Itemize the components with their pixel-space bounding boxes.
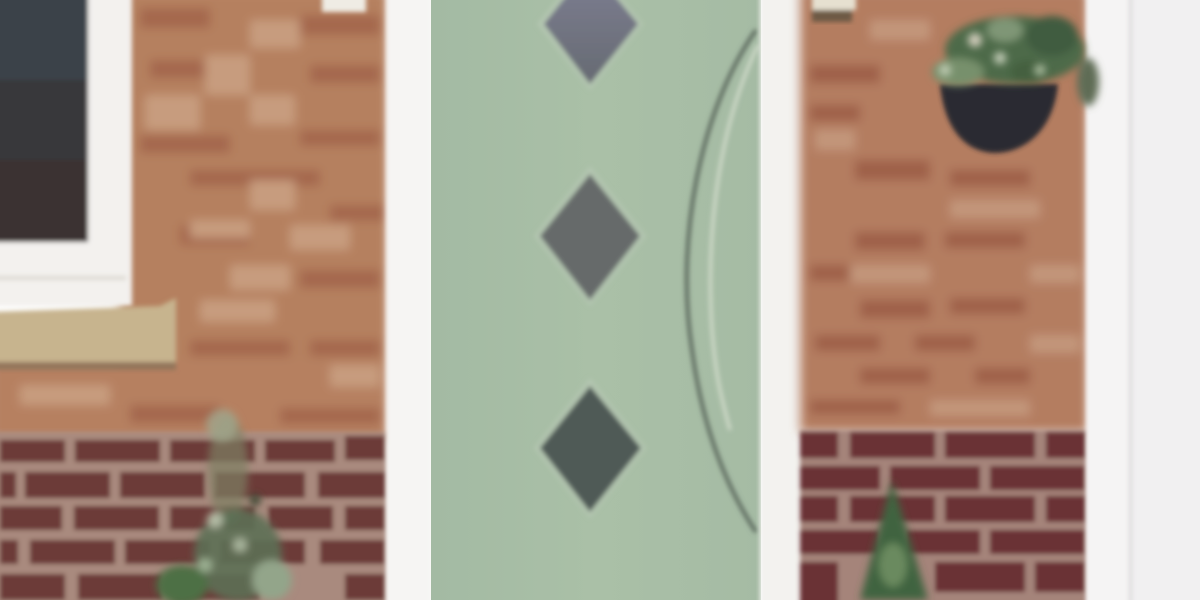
- right blue brick plinth: [800, 430, 1088, 600]
- stone window sill: [0, 298, 176, 370]
- basket foliage: [932, 16, 1099, 106]
- left door frame: [386, 0, 432, 600]
- left climbing shrub: [156, 409, 292, 600]
- wall lights at top: [322, 0, 856, 22]
- right white column: [1086, 0, 1200, 600]
- left blue brick plinth: [0, 432, 388, 600]
- icon: bottom diamond glass: [534, 378, 646, 518]
- window with white frame: [0, 0, 132, 306]
- right conifer shrub: [860, 480, 928, 600]
- left brick wall: [0, 0, 388, 440]
- basket pot: [940, 84, 1058, 153]
- icon: middle diamond glass: [534, 166, 646, 306]
- green door panel: [431, 0, 761, 600]
- right brick wall: [800, 0, 1088, 432]
- decorative curved door inlay: [687, 30, 758, 532]
- icon: top diamond glass: [537, 0, 643, 90]
- right door frame: [760, 0, 800, 600]
- hanging basket with plant: [932, 16, 1099, 153]
